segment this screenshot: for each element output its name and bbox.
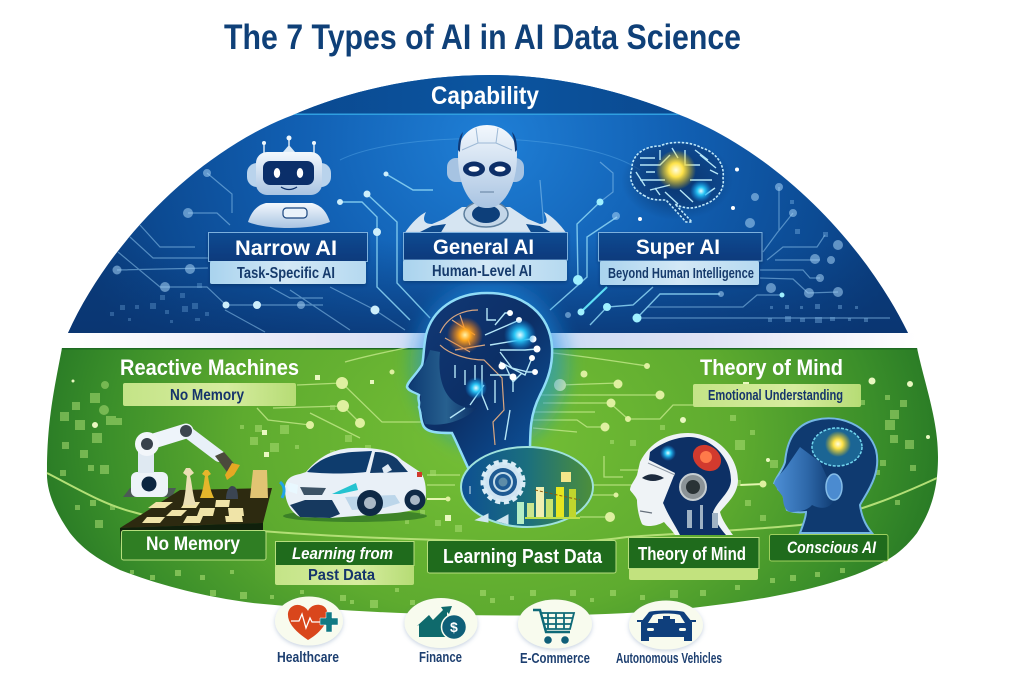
label: Learning from Past Data: Learning from [292,544,393,563]
industry: healthcare: Healthcare [277,650,339,666]
label: General AI: Human-Level AI [432,263,532,280]
industry: finance: Finance [419,650,462,666]
panel: green types [47,345,938,616]
label: General AI [403,232,568,281]
gear [483,462,523,502]
label: Learning Past Data: Learning Past Data [443,546,603,568]
central AI head [402,270,578,472]
label: Conscious AI [770,534,888,561]
label: Learning Past Data [428,540,616,573]
icon: shopping cart [533,610,574,644]
industry: autonomous vehicles: Autonomous Vehicles [616,651,722,667]
label: Narrow AI [208,232,368,284]
label: Reactive Machines: No Memory [170,387,244,404]
industry: healthcare [275,596,343,666]
industry: finance [404,598,478,666]
icon: conscious AI head [774,418,877,533]
label: No Memory: No Memory [146,534,240,555]
label: Super AI: Beyond Human Intelligence [608,265,754,282]
label: Narrow AI: Task-Specific AI [237,265,335,282]
icon: humanoid robot head [630,433,738,535]
icon: learning data bubble [461,447,593,527]
label: No Memory [122,530,266,560]
icon: chart with coin: $ [450,619,458,635]
label: Theory of Mind heading: Emotional Understanding [708,387,843,404]
label: Narrow AI: Narrow AI [235,237,337,260]
capability heading: Capability [431,82,539,110]
industry: e-commerce [518,600,592,667]
industry: autonomous vehicles [616,600,722,667]
pale divider strip [68,333,916,349]
narrow AI robot icon [247,136,331,228]
head circuits [440,308,540,445]
circuit traces: left [110,169,433,332]
title: The 7 Types of AI in AI Data Science [224,18,741,57]
chessboard [120,488,272,549]
icon: white car [280,448,427,522]
label: Super AI [598,232,762,285]
label: Theory of Mind box: Theory of Mind [638,544,746,564]
label: Theory of Mind heading: Theory of Mind [700,355,843,380]
icon: car front [637,610,696,641]
label: Conscious AI: Conscious AI [787,539,876,557]
label: Reactive Machines [120,355,299,406]
label: Learning from Past Data: Past Data [308,567,375,584]
label: Theory of Mind heading [693,355,861,407]
icon: heart with cross [288,605,338,640]
head face shading [409,350,477,425]
circuit traces and data squares [47,345,937,608]
circuit traces: right [540,162,890,325]
label: Learning from Past Data [275,542,414,585]
label: Super AI: Super AI [636,236,720,259]
label: Theory of Mind box [628,538,759,580]
general AI robot icon [404,125,567,234]
capability header band [293,75,680,115]
bar chart [517,472,580,524]
label: Reactive Machines: Reactive Machines [120,355,299,380]
industry: e-commerce: E-Commerce [520,651,590,667]
super AI brain icon [621,140,739,222]
label: General AI: General AI [433,236,534,259]
icon: robot arm playing chess [120,425,272,549]
panel: capability dome [60,70,920,333]
